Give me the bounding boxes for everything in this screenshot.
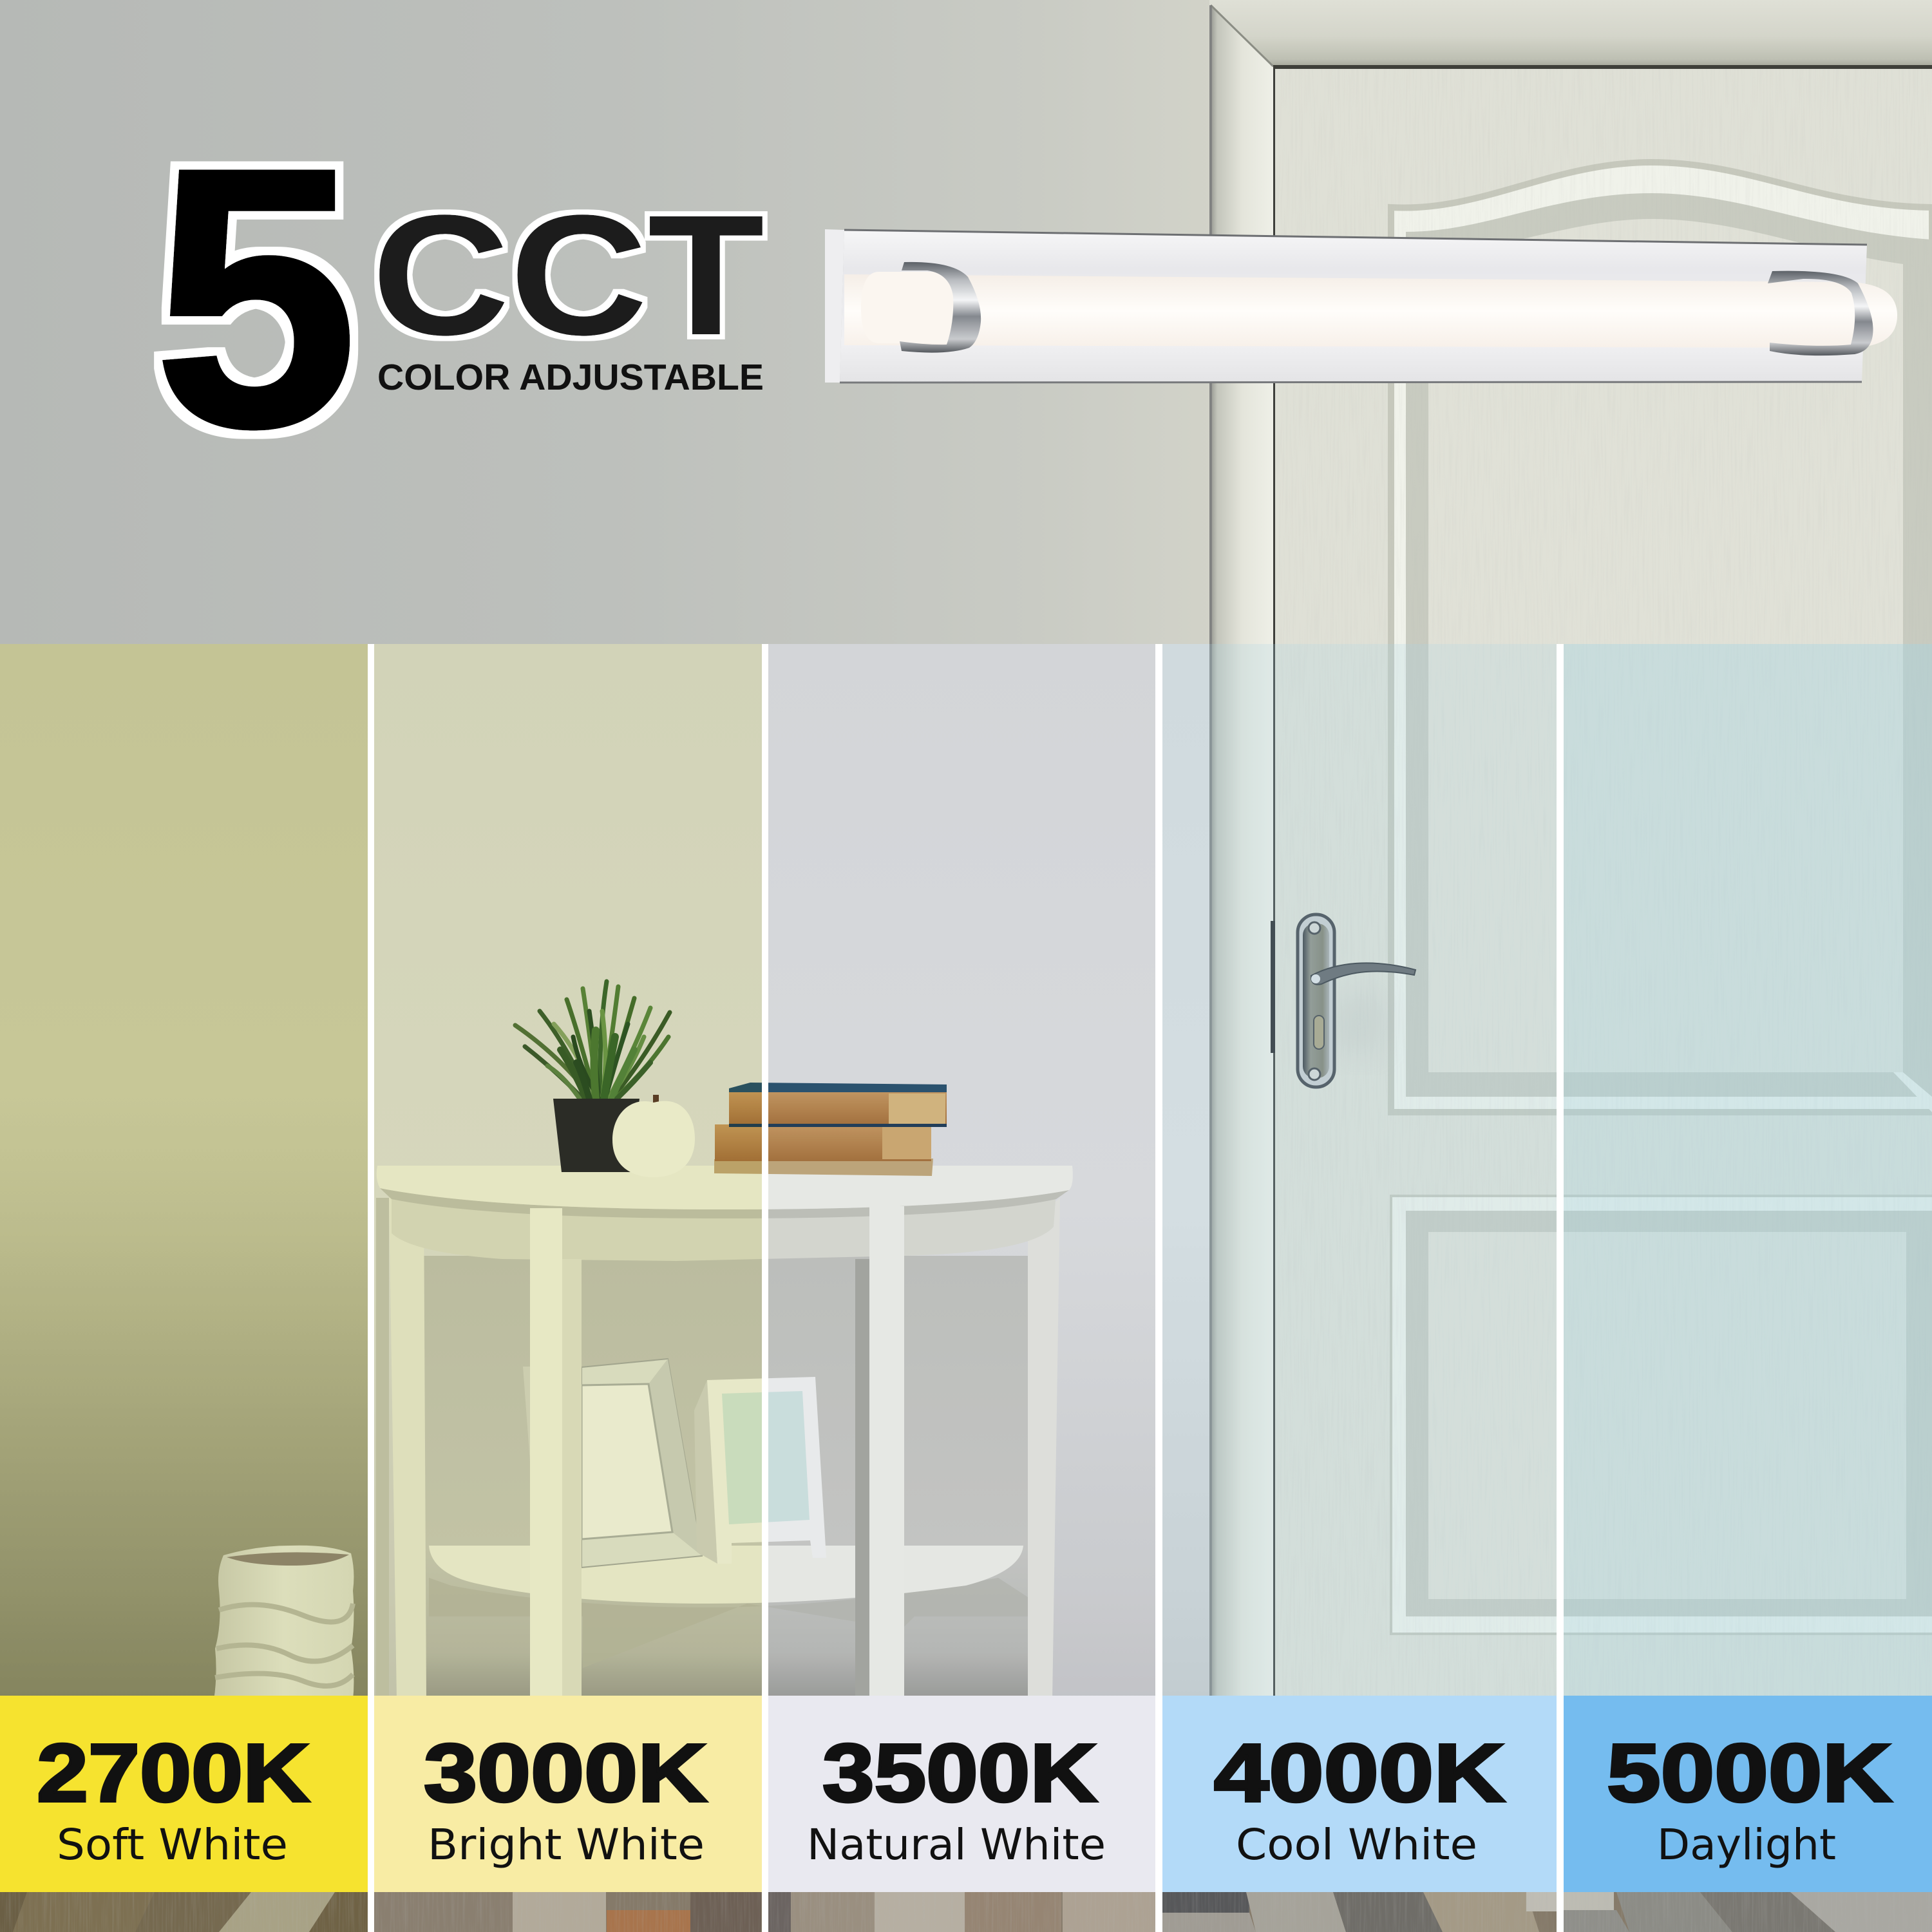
stack of books: [714, 1083, 947, 1176]
swatch: 4000K Cool White: 4000K: [1214, 1727, 1505, 1819]
ceramic vase: [214, 1546, 354, 1700]
swatch: 3500K Natural White: 3500K: [822, 1727, 1097, 1819]
lower shelf: [429, 1546, 1028, 1668]
table top and apron: [377, 1166, 1073, 1261]
swatch: 4000K Cool White: [1162, 1696, 1557, 1892]
colour temperature tint bands: [0, 644, 1155, 1700]
swatch: 3000K Bright White: [374, 1696, 762, 1892]
white standing picture frame: [694, 1377, 826, 1564]
door leaf: [1271, 69, 1932, 1705]
swatch: 2700K Soft White: Soft White: [57, 1820, 288, 1870]
potted plant: [515, 981, 670, 1172]
swatch: 5000K Daylight: 5000K: [1607, 1727, 1892, 1819]
swatch: 3500K Natural White: [768, 1696, 1155, 1892]
wooden floor planks: [0, 1887, 1932, 1932]
door wood grain: [1275, 69, 1932, 1705]
tube end cap: [861, 272, 956, 343]
tilted picture frame: [523, 1359, 702, 1567]
swatch: 3000K Bright White: 3000K: [424, 1727, 707, 1819]
subtitle: COLOR ADJUSTABLE: [377, 357, 764, 398]
CCT: CCT: [372, 180, 764, 371]
door casing and lintel: [1209, 0, 1932, 1705]
wall fixture: LED vanity bar: [825, 229, 1897, 383]
ceramic apple: [612, 1095, 695, 1177]
right chrome ring: [1768, 271, 1873, 355]
wall: [0, 0, 1217, 1900]
swatch: 5000K Daylight: [1564, 1696, 1932, 1892]
glowing tube: [844, 274, 1897, 348]
back legs: [376, 1198, 1060, 1700]
left chrome ring: [900, 262, 981, 353]
lower door panel: [1391, 1196, 1932, 1634]
upper door panel with arched top: [1391, 162, 1932, 1112]
swatch: 2700K Soft White: [0, 1696, 368, 1892]
cool tint bands over the door: [1162, 644, 1932, 1700]
swatch: 5000K Daylight: Daylight: [1657, 1820, 1836, 1870]
swatch: 3000K Bright White: Bright White: [428, 1820, 705, 1870]
backplate: [825, 229, 1867, 383]
headline: 5 CCT color adjustable: [153, 92, 764, 504]
shadow area beneath console table: [412, 1256, 1037, 1707]
swatch: 4000K Cool White: Cool White: [1236, 1820, 1477, 1870]
swatch: 2700K Soft White: 2700K: [37, 1727, 310, 1819]
white column dividers: [368, 644, 1564, 1932]
swatch: 3500K Natural White: Natural White: [807, 1820, 1106, 1870]
front legs: [530, 1206, 904, 1705]
big numeral 5: 5: [153, 92, 358, 504]
door handle: [1298, 914, 1416, 1087]
console table: [376, 981, 1073, 1705]
